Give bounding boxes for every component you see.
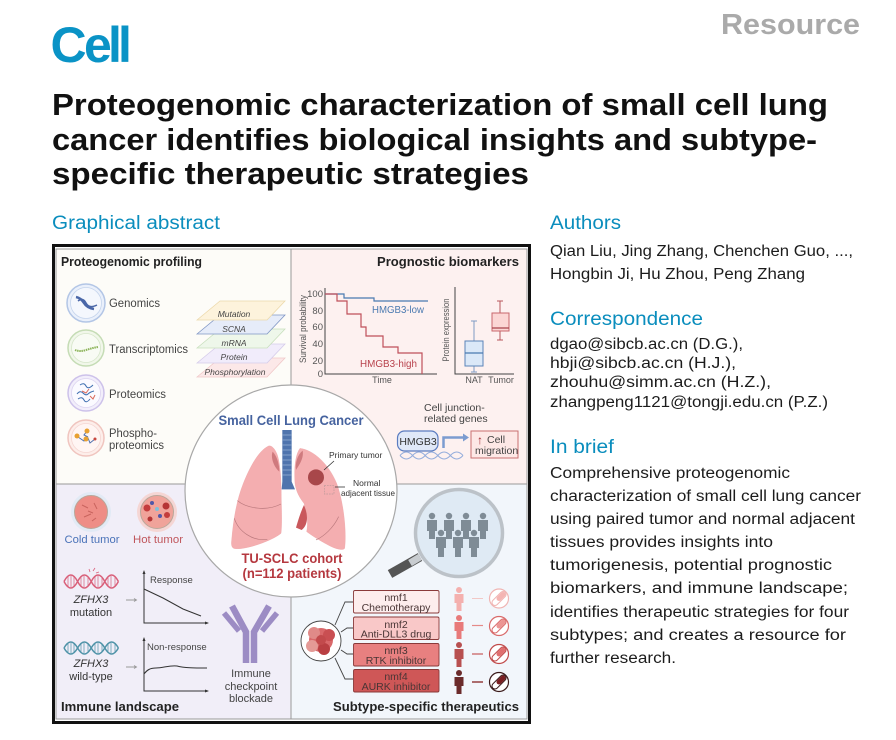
icon: proteomics bbox=[68, 375, 104, 411]
heading: subtype-specific therapeutics: Subtype-specific therapeutics bbox=[333, 699, 519, 714]
in brief block: tissues provides insights into bbox=[550, 534, 773, 551]
illustration: lungs and trachea bbox=[231, 430, 345, 549]
title: cancer identifies biological insights and subtype- bbox=[52, 123, 817, 157]
title: Proteogenomic characterization of small cell lung bbox=[52, 88, 828, 122]
label: ZFHX3 wild-type: ZFHX3 bbox=[73, 658, 109, 670]
label: immune checkpoint blockade bbox=[225, 668, 277, 705]
label: phosphoproteomics bbox=[109, 428, 164, 452]
central circle: SCLC cohort bbox=[185, 385, 397, 597]
icon: cold tumor bbox=[71, 492, 111, 532]
row: nmf1 patient and pill bbox=[454, 587, 508, 611]
survival chart: 80 bbox=[312, 306, 323, 317]
chart: response: Response bbox=[150, 575, 193, 586]
icon: tumor with subtype connectors bbox=[301, 602, 353, 679]
icon: hot tumor bbox=[137, 492, 177, 532]
chart: non-response: Non-response bbox=[147, 642, 207, 653]
title: specific therapeutic strategies bbox=[52, 157, 529, 191]
subtype box: nmf2: Anti-DLL3 drug bbox=[361, 628, 431, 640]
survival chart: 40 bbox=[312, 339, 323, 350]
subtype box: nmf3: RTK inhibitor bbox=[366, 655, 427, 667]
correspondence block: Correspondence bbox=[550, 309, 703, 330]
heading: small cell lung cancer: Small Cell Lung Cancer bbox=[218, 412, 364, 428]
DNA strand bbox=[400, 452, 463, 459]
callout: normal adjacent tissue bbox=[335, 478, 395, 498]
in brief block: characterization of small cell lung cancer bbox=[550, 488, 861, 505]
survival chart bbox=[298, 288, 437, 385]
survival chart: 100 bbox=[307, 289, 323, 300]
icon: wild-type DNA bbox=[64, 642, 118, 654]
label: proteomics: Proteomics bbox=[109, 389, 166, 401]
survival chart: 0 bbox=[318, 369, 323, 380]
in brief block: In brief bbox=[550, 437, 615, 458]
label: TU-SCLC cohort: (n=112 patients) bbox=[242, 566, 342, 581]
label: phosphoproteomics: Phospho- bbox=[109, 428, 157, 440]
icon: genomics bbox=[67, 284, 105, 322]
icon: transcriptomics bbox=[68, 330, 104, 366]
panel: subtype-specific therapeutics bbox=[291, 484, 527, 719]
in brief block: identifies therapeutic strategies for four bbox=[550, 604, 849, 621]
subtype box: nmf2: nmf2 bbox=[384, 619, 408, 631]
label: TU-SCLC cohort: TU-SCLC cohort bbox=[242, 551, 343, 566]
subtype box: nmf4: nmf4 bbox=[384, 671, 408, 683]
heading: proteogenomic profiling: Proteogenomic profiling bbox=[61, 254, 202, 269]
survival chart: HMGB3-high bbox=[360, 359, 417, 370]
survival chart: Time bbox=[372, 375, 392, 385]
heading: Graphical abstract: Graphical abstract bbox=[52, 213, 221, 234]
data layers stack: SCNA bbox=[222, 324, 246, 334]
arrow head bbox=[463, 434, 469, 442]
correspondence block: hbji@sibcb.ac.cn (H.J.), bbox=[550, 355, 736, 372]
label: ZFHX3 mutation: ZFHX3 bbox=[73, 594, 109, 606]
data layers stack: Protein bbox=[221, 352, 248, 362]
in brief block: tumorigenesis, potential prognostic bbox=[550, 557, 832, 574]
data layers stack: mRNA bbox=[221, 338, 247, 348]
box: cell migration bbox=[471, 431, 518, 458]
arrow: activates migration bbox=[444, 438, 464, 448]
text: cell junction genes: related genes bbox=[424, 413, 488, 425]
in brief block bbox=[550, 437, 861, 667]
label: ZFHX3 mutation: mutation bbox=[70, 607, 112, 619]
correspondence block: zhangpeng1121@tongji.edu.cn (P.Z.) bbox=[550, 394, 828, 411]
subtype box: nmf1: nmf1 bbox=[384, 592, 408, 604]
survival chart: Survival probability bbox=[298, 295, 308, 363]
correspondence block bbox=[550, 309, 828, 411]
subtype box: nmf3 bbox=[354, 644, 439, 667]
box: cell migration: ↑ bbox=[477, 433, 483, 447]
heading: prognostic biomarkers: Prognostic biomarkers bbox=[377, 254, 519, 269]
survival chart: 60 bbox=[312, 322, 323, 333]
callout: primary tumor: Primary tumor bbox=[329, 450, 383, 460]
callout: normal adjacent tissue: adjacent tissue bbox=[341, 488, 395, 498]
icon: mutated DNA bbox=[64, 568, 118, 588]
subtype box: nmf1 bbox=[354, 590, 439, 614]
journal logo: Cell: Cell bbox=[50, 17, 132, 73]
arrow: wild-type to non-response bbox=[126, 666, 136, 668]
in brief block: using paired tumor and normal adjacent bbox=[550, 511, 856, 528]
in brief block: Comprehensive proteogenomic bbox=[550, 465, 790, 482]
authors block bbox=[550, 213, 853, 283]
label: cold tumor: Cold tumor bbox=[64, 534, 120, 546]
correspondence block: zhouhu@simm.ac.cn (H.Z.), bbox=[550, 374, 771, 391]
callout: primary tumor bbox=[324, 450, 383, 470]
icon: magnifying glass with cohort bbox=[390, 490, 502, 576]
row: nmf2 patient and pill bbox=[454, 615, 508, 639]
subtype box: nmf1: Chemotherapy bbox=[362, 602, 431, 614]
panel: proteogenomic profiling bbox=[56, 249, 291, 484]
icon: phosphoproteomics bbox=[68, 420, 104, 456]
label: immune checkpoint blockade: Immune bbox=[231, 668, 271, 680]
label: immune checkpoint blockade: checkpoint bbox=[225, 681, 277, 693]
HMGB3 gene box: HMGB3 bbox=[399, 436, 437, 448]
subtype box: nmf3: nmf3 bbox=[384, 645, 408, 657]
row: nmf3 patient and pill bbox=[454, 642, 508, 667]
heading: immune landscape: Immune landscape bbox=[61, 699, 179, 714]
subtype box: nmf2 bbox=[354, 617, 439, 640]
callout: normal adjacent tissue: Normal bbox=[353, 478, 381, 488]
panel: prognostic biomarkers bbox=[291, 249, 527, 484]
article type: Resource: Resource bbox=[721, 9, 860, 41]
survival chart: HMGB3-low bbox=[372, 305, 425, 316]
authors block: Hongbin Ji, Hu Zhou, Peng Zhang bbox=[550, 266, 805, 283]
label: phosphoproteomics: proteomics bbox=[109, 440, 164, 452]
label: ZFHX3 mutation bbox=[70, 594, 112, 619]
subtype box: nmf4 bbox=[354, 670, 439, 693]
box plot: protein expression: Protein expression bbox=[441, 298, 451, 362]
arrow: mutation to response bbox=[126, 598, 136, 602]
data layers stack: Phosphorylation bbox=[205, 367, 266, 377]
chart: response bbox=[142, 570, 209, 624]
label: genomics: Genomics bbox=[109, 298, 160, 310]
text: cell junction genes: Cell junction- bbox=[424, 402, 485, 414]
survival chart: 20 bbox=[312, 356, 323, 367]
data layers stack: Mutation bbox=[218, 309, 251, 319]
in brief block: biomarkers, and immune landscape; bbox=[550, 580, 848, 597]
text: cell junction genes bbox=[424, 402, 488, 425]
box plot: protein expression: Tumor bbox=[488, 375, 514, 385]
authors block: Qian Liu, Jing Zhang, Chenchen Guo, ..., bbox=[550, 243, 853, 260]
label: ZFHX3 wild-type bbox=[68, 658, 113, 683]
label: immune checkpoint blockade: blockade bbox=[229, 693, 273, 705]
label: hot tumor: Hot tumor bbox=[133, 534, 183, 546]
title bbox=[52, 88, 828, 191]
in brief block: further research. bbox=[550, 650, 676, 667]
panel: immune landscape bbox=[56, 484, 291, 719]
HMGB3 gene box bbox=[398, 431, 438, 451]
in brief block: subtypes; and creates a resource for bbox=[550, 627, 846, 644]
row: nmf4 patient and pill bbox=[454, 670, 508, 694]
chart: non-response bbox=[142, 637, 209, 692]
icon: antibody bbox=[224, 606, 277, 663]
data layers stack bbox=[197, 301, 285, 377]
label: ZFHX3 wild-type: wild-type bbox=[68, 671, 113, 683]
label: transcriptomics: Transcriptomics bbox=[109, 344, 188, 356]
authors block: Authors bbox=[550, 213, 621, 234]
box plot: protein expression bbox=[441, 287, 514, 385]
graphical abstract frame bbox=[54, 246, 530, 722]
correspondence block: dgao@sibcb.ac.cn (D.G.), bbox=[550, 336, 743, 353]
box plot: protein expression: NAT bbox=[465, 375, 483, 385]
label: TU-SCLC cohort bbox=[242, 551, 343, 581]
subtype box: nmf4: AURK inhibitor bbox=[362, 681, 431, 693]
box: cell migration: Cell bbox=[487, 434, 505, 446]
box: cell migration: migration bbox=[475, 445, 518, 457]
